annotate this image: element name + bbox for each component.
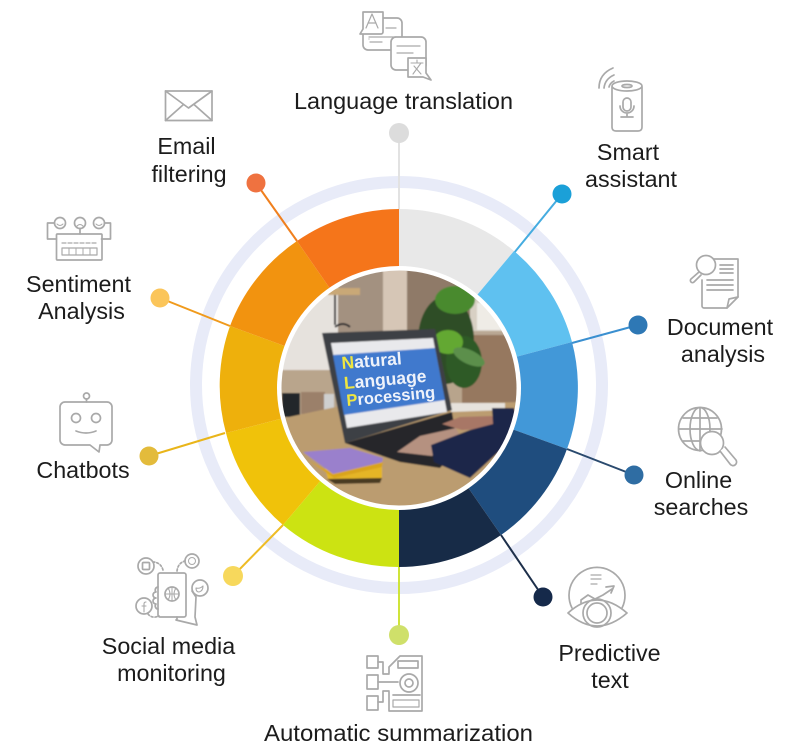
icon: smart assistant xyxy=(599,68,642,131)
label: online searches: Online xyxy=(665,467,732,493)
label: social media monitoring: monitoring xyxy=(117,660,226,686)
label: social media monitoring xyxy=(102,633,235,686)
label: smart assistant xyxy=(585,139,677,192)
icon: email xyxy=(166,91,212,120)
label: document analysis xyxy=(667,314,774,367)
label: predictive text xyxy=(558,640,661,693)
center photo: laptop showing Natural Language Processing: Language xyxy=(343,366,427,393)
label: online searches: searches xyxy=(654,494,748,520)
label: chatbots: Chatbots xyxy=(36,457,130,483)
label: sentiment analysis: Sentiment xyxy=(26,271,131,297)
center photo: laptop showing Natural Language Processing xyxy=(275,265,525,515)
icon: automatic summarization xyxy=(367,656,422,711)
label: predictive text: Predictive xyxy=(558,640,661,666)
label: document analysis: Document xyxy=(667,314,774,340)
connector lines xyxy=(149,133,638,635)
label: predictive text: text xyxy=(591,667,629,693)
label: email filtering: filtering xyxy=(151,161,227,187)
donut chart xyxy=(220,209,578,567)
pale outer ring xyxy=(196,182,602,588)
icon: social media monitoring xyxy=(136,554,208,625)
icon: sentiment analysis xyxy=(48,218,110,260)
label: social media monitoring: Social media xyxy=(102,633,235,659)
label: sentiment analysis: Analysis xyxy=(38,298,125,324)
center photo: laptop showing Natural Language Processing: Processing xyxy=(346,384,436,410)
dots xyxy=(140,123,648,645)
icon: chatbots xyxy=(60,393,112,452)
icon: predictive text xyxy=(568,567,627,627)
label: email filtering: Email xyxy=(157,133,216,159)
label: email filtering xyxy=(151,133,227,187)
label: smart assistant: assistant xyxy=(585,166,677,192)
label: document analysis: analysis xyxy=(681,341,765,367)
icon: document analysis xyxy=(690,256,738,308)
center photo: laptop showing Natural Language Processing: Natural xyxy=(341,348,402,373)
label: smart assistant: Smart xyxy=(597,139,660,165)
icon: online searches xyxy=(678,408,737,466)
label: language translation: Language translation xyxy=(294,88,513,114)
label: online searches xyxy=(654,467,748,520)
icon: language translation xyxy=(360,12,431,80)
label: sentiment analysis xyxy=(26,271,131,324)
